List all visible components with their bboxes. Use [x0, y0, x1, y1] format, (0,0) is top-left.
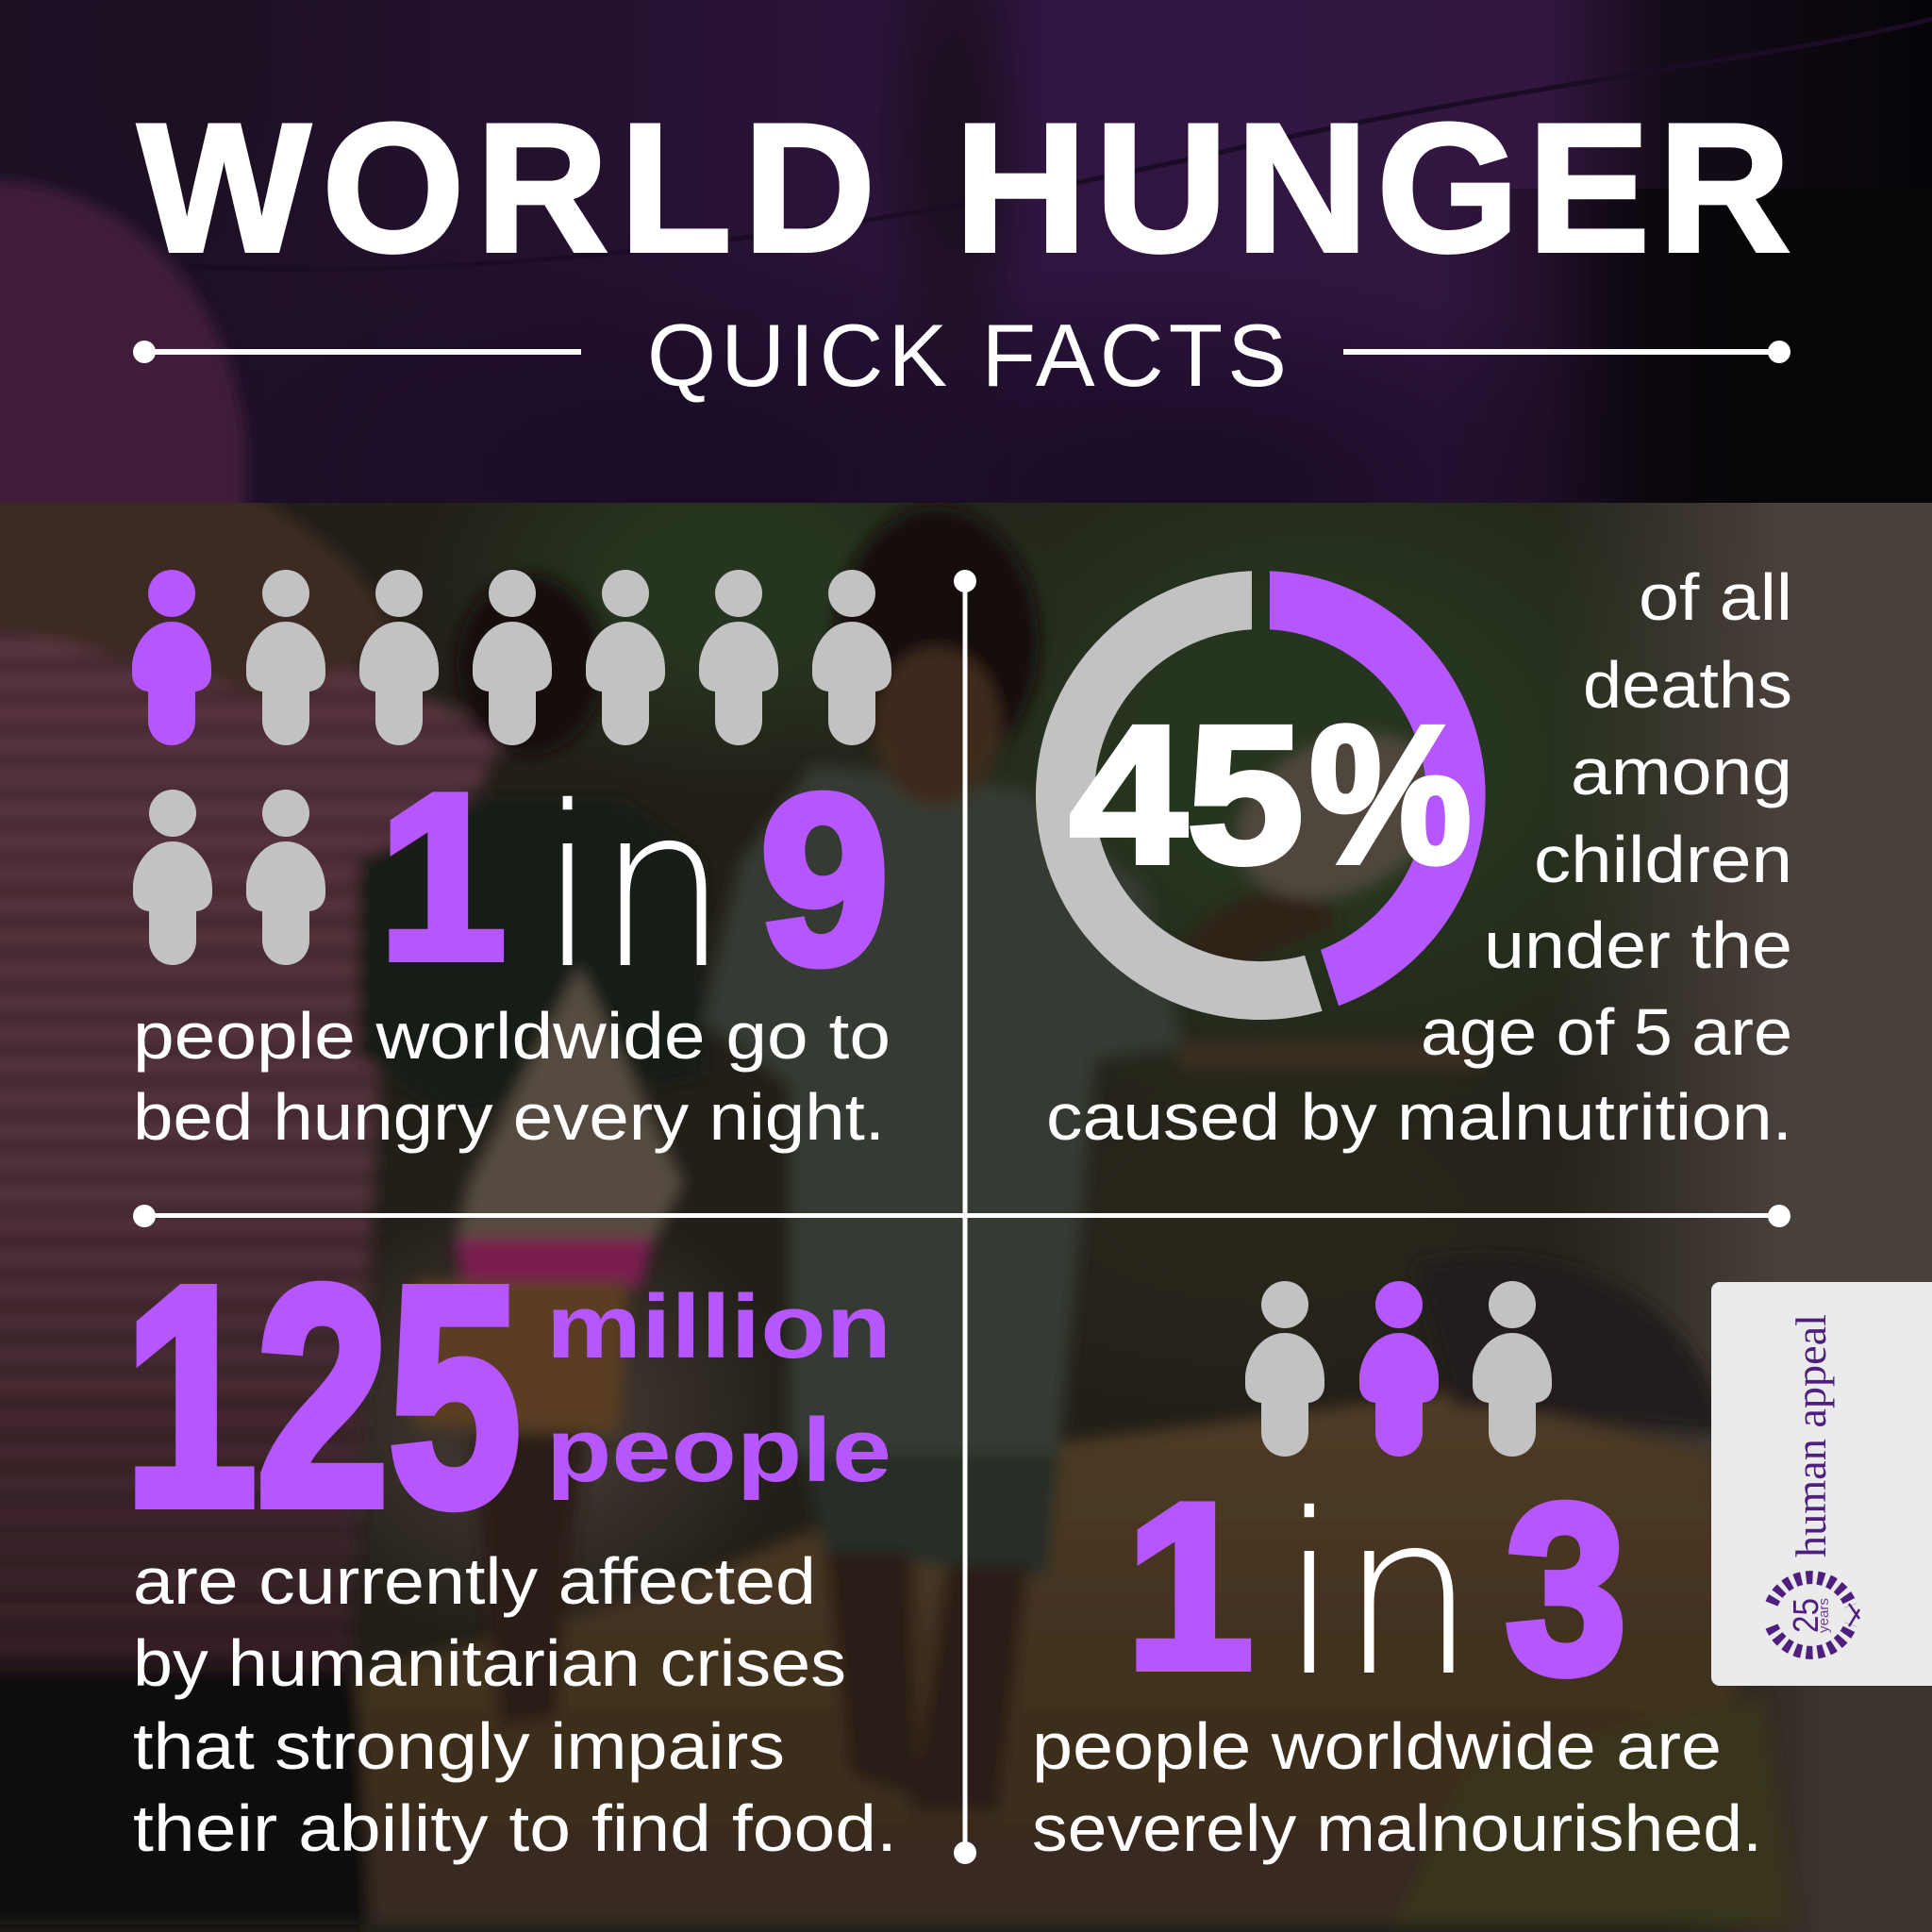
statistic: 1 in 3: 1	[1126, 1455, 1253, 1717]
pictogram: nine people	[132, 570, 891, 965]
donut chart	[1036, 571, 1486, 1020]
panel: 125 million	[125, 1222, 897, 1865]
icon: 25 years wreath	[1772, 1577, 1859, 1653]
panel: 45%	[1036, 560, 1792, 1154]
icon: 25 years wreath: years	[1816, 1598, 1832, 1633]
percentage: %	[1309, 686, 1472, 905]
statistic: 1 in 9: 9	[760, 745, 889, 1013]
title: HUNGER	[955, 86, 1790, 291]
bowl and hand	[1187, 892, 1337, 961]
caption	[133, 1544, 897, 1865]
statistic: 1 in 9: in	[540, 758, 728, 1018]
caption	[1032, 1709, 1762, 1865]
percentage	[1070, 686, 1472, 905]
sweater person left	[0, 623, 509, 1679]
statistic unit: people	[546, 1400, 891, 1501]
statistic: 1 in 3: 3	[1506, 1455, 1626, 1723]
child with backpack	[457, 575, 604, 755]
statistic: 1 in 3	[1126, 1455, 1626, 1725]
subtitle text: QUICK FACTS	[647, 306, 1287, 405]
percentage: 45	[1070, 686, 1304, 905]
caption: their ability to find food.	[133, 1791, 897, 1865]
quadrant dividers	[133, 570, 1790, 1864]
logo wordmark: human appeal	[1787, 1314, 1835, 1557]
logo card	[1711, 1282, 1932, 1686]
caption	[133, 999, 891, 1154]
subtitle with rules	[133, 306, 1790, 405]
ground	[358, 1392, 1762, 1924]
panel: 1 in 3	[1032, 1281, 1762, 1865]
caption: bed hungry every night.	[133, 1080, 885, 1154]
caption: severely malnourished.	[1032, 1791, 1762, 1865]
left rule	[133, 341, 581, 363]
pictogram: three people	[1245, 1281, 1552, 1457]
caption: caused by malnutrition.	[1046, 1080, 1792, 1154]
caption: under the	[1484, 908, 1792, 982]
main boy	[702, 764, 1183, 1454]
caption: deaths	[1583, 648, 1792, 722]
statistic: 1 in 3: in	[1280, 1466, 1476, 1725]
caption: by humanitarian crises	[133, 1626, 846, 1700]
caption: of all	[1639, 560, 1792, 634]
title	[138, 86, 1790, 291]
statistic: 1 in 9: 1	[379, 745, 506, 1008]
statistic: 1 in 9	[379, 745, 889, 1018]
title: WORLD	[138, 86, 875, 291]
right rule	[1343, 341, 1790, 363]
caption: that strongly impairs	[133, 1709, 785, 1783]
icon: 25 years wreath: 25	[1787, 1598, 1826, 1633]
caption: people worldwide are	[1032, 1709, 1722, 1783]
caption	[1046, 560, 1792, 1154]
caption: children	[1534, 823, 1792, 896]
caption: among	[1571, 735, 1792, 808]
caption: age of 5 are	[1421, 995, 1792, 1069]
caption: people worldwide go to	[133, 999, 891, 1073]
statistic unit: million	[546, 1276, 891, 1377]
statistic unit	[546, 1276, 891, 1501]
caption: are currently affected	[133, 1544, 816, 1618]
panel: 1 in 9	[132, 570, 891, 1154]
statistic: 125: 125	[125, 1222, 521, 1570]
